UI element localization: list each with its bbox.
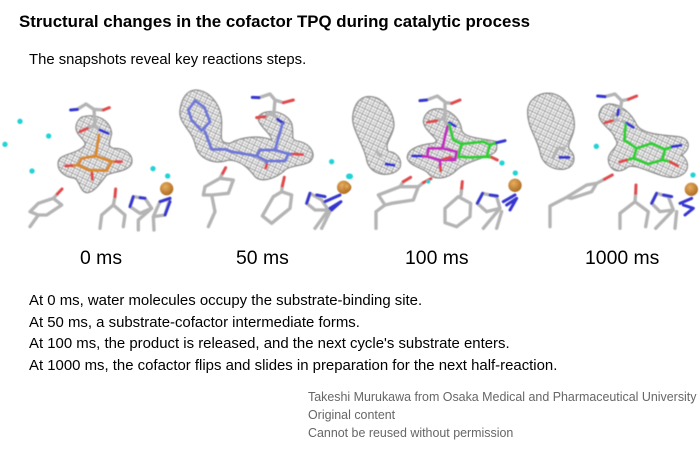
description text block: At 100 ms, the product is released, and the next cycle's substrate enters. bbox=[29, 335, 510, 352]
time label: 1000 ms: 1000 ms bbox=[585, 247, 659, 269]
description text block: At 1000 ms, the cofactor flips and slides in preparation for the next half-reaction. bbox=[29, 357, 557, 374]
credit text: Takeshi Murukawa from Osaka Medical and Pharmaceutical University bbox=[308, 390, 696, 404]
panel: 0 ms snapshot bbox=[2, 104, 173, 230]
subtitle: The snapshots reveal key reactions steps. bbox=[29, 52, 306, 68]
time label: 50 ms: 50 ms bbox=[236, 247, 289, 269]
time label: 100 ms: 100 ms bbox=[405, 247, 469, 269]
time label: 0 ms: 0 ms bbox=[80, 247, 122, 269]
title: Structural changes in the cofactor TPQ during catalytic process bbox=[19, 12, 530, 31]
description text block: At 50 ms, a substrate-cofactor intermediate forms. bbox=[29, 314, 360, 331]
panel: 100 ms snapshot bbox=[343, 96, 522, 228]
description text block: At 0 ms, water molecules occupy the substrate-binding site. bbox=[29, 292, 422, 309]
credit text bbox=[308, 390, 696, 440]
description text block bbox=[29, 292, 557, 374]
credit text: Original content bbox=[308, 408, 395, 422]
credit text: Cannot be reused without permission bbox=[308, 426, 513, 440]
panel: 50 ms snapshot bbox=[180, 90, 353, 228]
panel: 1000 ms snapshot bbox=[528, 93, 698, 228]
